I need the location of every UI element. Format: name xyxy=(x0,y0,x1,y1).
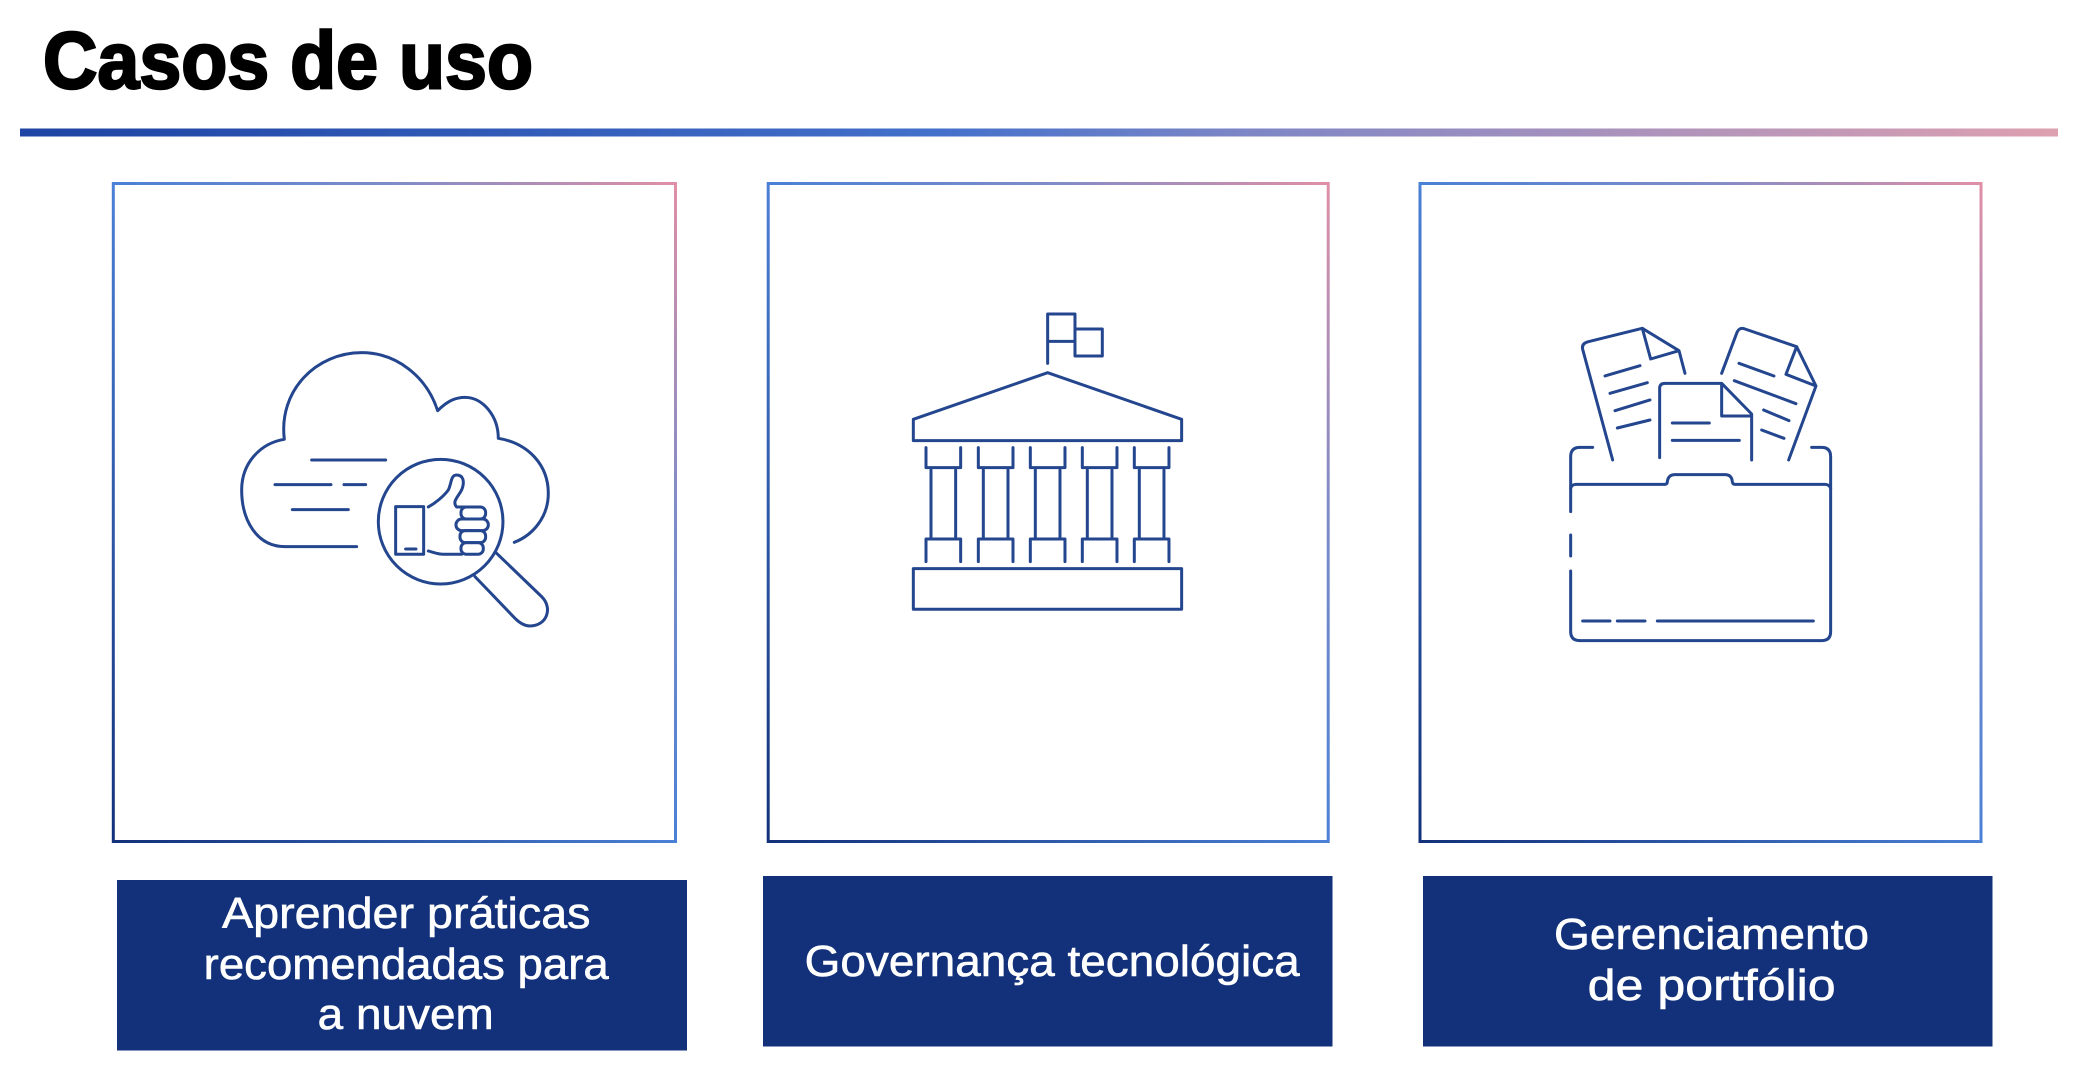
panel: aprender práticas xyxy=(113,184,676,842)
card frame xyxy=(113,184,676,842)
label: gerenciamento de portfólio: Gerenciamento xyxy=(1554,910,1869,959)
title rule xyxy=(20,128,2058,136)
label: aprender práticas recomendadas para a nuvem: Aprender práticas xyxy=(222,889,590,938)
label: aprender práticas recomendadas para a nuvem: recomendadas para xyxy=(204,940,609,989)
panel: governança tecnológica xyxy=(768,184,1328,842)
icon: cloud with magnifier and thumbs up xyxy=(242,353,548,626)
icon: government building with flag xyxy=(913,314,1182,609)
label: governança tecnológica: Governança tecnológica xyxy=(805,937,1300,986)
label: aprender práticas recomendadas para a nuvem: a nuvem xyxy=(318,990,494,1039)
icon: folder with documents xyxy=(1571,328,1831,641)
label: governança tecnológica xyxy=(763,876,1332,1046)
label: gerenciamento de portfólio xyxy=(1423,876,1992,1046)
label: aprender práticas recomendadas para a nuvem xyxy=(117,880,687,1050)
panel: gerenciamento de portfólio xyxy=(1420,184,1981,842)
card frame xyxy=(1420,184,1981,842)
label: gerenciamento de portfólio: de portfólio xyxy=(1588,961,1836,1010)
card frame xyxy=(768,184,1328,842)
title: Casos de uso xyxy=(43,16,533,106)
